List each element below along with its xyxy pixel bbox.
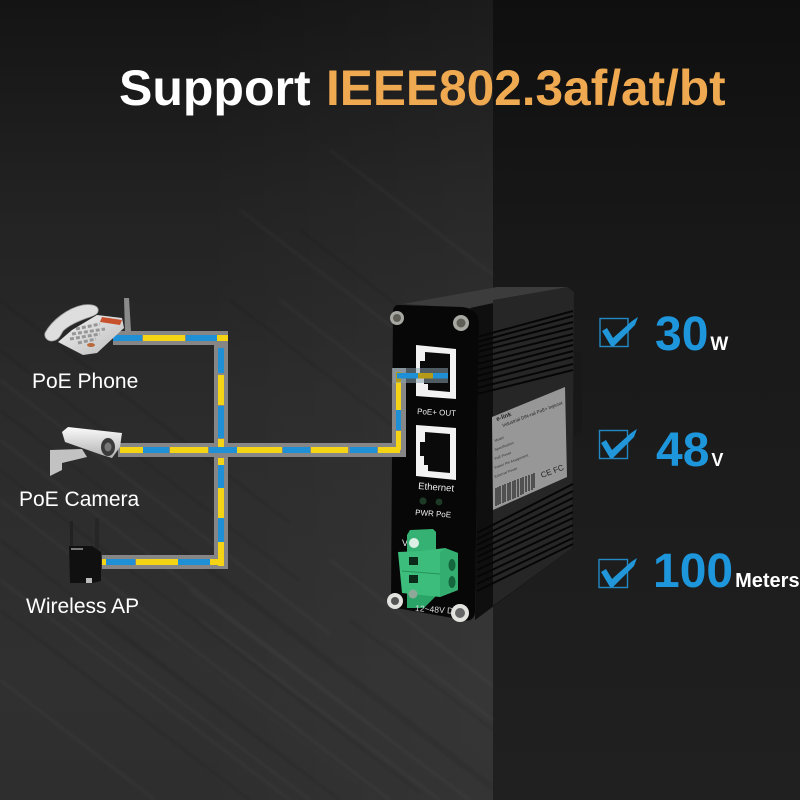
product label: PoE Power <box>494 450 513 461</box>
label: 12~48V DC: 12~48V DC <box>415 603 460 616</box>
icon: PoE phone <box>45 298 131 355</box>
upper and lower-left screws <box>387 311 469 609</box>
product label: External Power <box>494 466 519 479</box>
icon: checkbox <box>600 317 638 346</box>
label: PoE Phone: PoE Phone <box>32 370 138 393</box>
port: Ethernet <box>416 425 456 480</box>
spec: 100 Meters <box>599 545 800 598</box>
value: 100: 100Meters <box>653 545 800 598</box>
spec: 48V <box>600 424 723 477</box>
PoE injector device <box>387 287 582 622</box>
product label: Model <box>494 436 505 443</box>
product label: CE FC <box>539 463 565 480</box>
network cables <box>102 335 448 566</box>
background: left textured panel <box>0 0 493 800</box>
port: PoE+ OUT <box>416 345 456 399</box>
label: PoE+ OUT: PoE+ OUT <box>417 407 456 418</box>
status LEDs <box>419 497 442 505</box>
device top face <box>403 287 573 320</box>
title: Support <box>119 60 311 116</box>
device front panel <box>391 305 479 621</box>
label: Wireless AP: Wireless AP <box>26 595 139 618</box>
value: 48: 48V <box>656 424 723 477</box>
green terminal block <box>398 529 458 608</box>
product label <box>492 387 567 510</box>
product label: Specification <box>494 441 514 452</box>
icon: wireless AP <box>69 518 101 583</box>
value: 30: 30W <box>655 308 728 361</box>
product label: Industrial DIN-rail PoE+ Injector <box>502 400 564 428</box>
label: PWR PoE: PWR PoE <box>415 508 451 520</box>
title: IEEE802.3af/at/bt <box>326 60 726 116</box>
icon: PoE camera <box>50 427 122 476</box>
product label: Power Pin Assignment <box>494 453 529 470</box>
product label: e-link <box>496 412 513 423</box>
icon: checkbox <box>599 558 637 588</box>
spec: 30W <box>600 308 728 361</box>
device side body <box>470 287 574 620</box>
cable entering PoE+ OUT port <box>393 368 448 383</box>
background: right dark panel <box>493 0 800 800</box>
label: V: V <box>402 538 408 548</box>
lower-right screw <box>451 604 469 622</box>
label: Ethernet: Ethernet <box>418 481 455 495</box>
label: PoE Camera: PoE Camera <box>19 488 140 511</box>
icon: checkbox <box>600 429 637 458</box>
